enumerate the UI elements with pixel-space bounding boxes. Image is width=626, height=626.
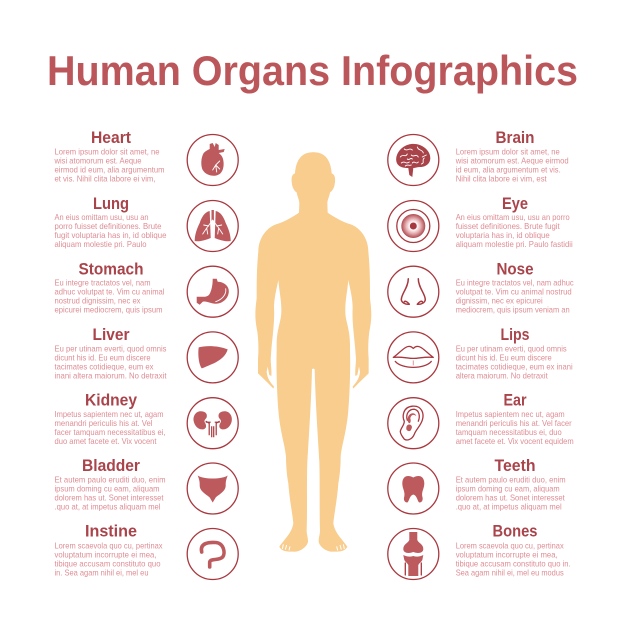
text: teeth description: [456, 475, 566, 512]
text: teeth description: Et autem paulo eruditi duo, enim: [456, 475, 566, 485]
text: bones description: voluptatum incorrupte ei mea,: [456, 549, 558, 559]
icon: lips: [388, 332, 439, 383]
heading: liver: Liver: [92, 326, 130, 344]
heading: bones: Bones: [492, 522, 538, 540]
text: ear description: amet facete et. Vix vocent equidem: [456, 436, 574, 446]
text: lips description: Eu per utinam everti, quod omnis: [456, 343, 567, 353]
text: stomach description: epicurei mediocrem, quis ipsum: [54, 305, 163, 315]
text: stomach description: adhuc volutpat te. Vim cu animal: [54, 287, 165, 297]
text: ear description: menandri periculis his at. Vel facer: [456, 418, 572, 428]
text: brain description: Nihil clita labore ei vim, est: [456, 173, 547, 183]
text: brain description: id eum, alia argumentum et vis.: [456, 164, 561, 174]
text: ear description: Impetus sapientem nec ut, agam: [456, 409, 565, 419]
text: nose description: mediocrem, quis ipsum veniam an: [456, 305, 570, 315]
heading: brain: Brain: [496, 129, 534, 147]
text: liver description: tacimates cotidieque, eum ex: [54, 361, 154, 371]
icon: eye: [388, 200, 439, 252]
text: bladder description: dolorem has ut. Sonet interesset: [54, 493, 164, 503]
text: ear description: [456, 409, 574, 446]
text: lung description: porro fuisset definitiones. Brute: [54, 221, 162, 231]
icon: bladder: [187, 463, 238, 514]
panel: teeth: [388, 457, 566, 514]
heading: lips: Lips: [500, 326, 530, 344]
text: nose description: Eu integre tractatos vel, nam adhuc: [456, 278, 574, 288]
text: lips description: dicunt his id. Eu eum discere: [456, 352, 552, 362]
text: stomach description: Eu integre tractatos vel, nam: [54, 278, 151, 288]
text: liver description: dicunt his id. Eu eum discere: [54, 352, 151, 362]
icon: nose: [388, 266, 439, 317]
text: eye description: fuisset definitiones. Brute fugit: [456, 221, 560, 231]
icon: stomach: [187, 266, 238, 317]
text: instine description: Lorem scaevola quo cu, pertinax: [54, 540, 163, 550]
icon: knee bones: [388, 528, 439, 580]
text: ear description: tamquam necessitatibus ei, duo: [456, 427, 562, 437]
panel: liver: [54, 326, 238, 383]
text: heart description: et vis. Nihil clita labore ei vim,: [54, 173, 156, 183]
text: eye description: voluptaria has in, id oblique: [456, 230, 550, 240]
text: instine description: in. Sea agam nihil ei, mel eu: [54, 567, 149, 577]
text: liver description: inani altera maiorum. No detraxit: [54, 370, 167, 380]
heading: stomach: Stomach: [78, 260, 144, 278]
text: bladder description: [54, 475, 166, 512]
text: heart description: Lorem ipsum dolor sit amet, ne: [54, 146, 160, 156]
text: brain description: Lorem ipsum dolor sit amet, ne: [456, 146, 560, 156]
icon: intestine: [187, 528, 238, 580]
text: instine description: tibique accusam constituto quo: [54, 558, 161, 568]
text: lung description: [54, 212, 167, 249]
text: eye description: An eius omittam usu, usu an porro: [456, 212, 570, 222]
text: instine description: voluptatum incorrupte ei mea,: [54, 549, 156, 559]
panel: bladder: [54, 457, 238, 514]
icon: kidneys: [187, 398, 238, 449]
panel: lung: [54, 195, 238, 252]
text: bones description: tibique accusam constituto quo in.: [456, 558, 571, 568]
text: eye description: [456, 212, 573, 249]
text: bones description: Lorem scaevola quo cu, pertinax: [456, 540, 564, 550]
panel: bones: [388, 522, 571, 580]
heading: lung: Lung: [93, 195, 129, 213]
text: stomach description: nostrud dignissim, nec ex: [54, 296, 141, 306]
text: bladder description: Et autem paulo eruditi duo, enim: [54, 475, 166, 485]
icon: ear: [388, 398, 439, 449]
icon: liver: [187, 332, 238, 383]
text: lung description: fugit voluptaria has in, id oblique: [54, 230, 167, 240]
panel: heart: [54, 129, 238, 186]
text: teeth description: ipsum doming cu eam, aliquam: [456, 484, 560, 494]
icon: heart: [187, 134, 238, 186]
heading: eye: Eye: [502, 195, 528, 213]
text: lung description: aliquam molestie pri. Paulo: [54, 239, 147, 249]
text: lung description: An eius omittam usu, usu an: [54, 212, 149, 222]
text: kidney description: duo amet facete et. Vix vocent: [54, 436, 157, 446]
human body silhouette: [255, 152, 371, 552]
text: kidney description: [54, 409, 166, 446]
heading: ear: Ear: [504, 392, 527, 410]
heading: nose: Nose: [496, 260, 534, 278]
icon: brain: [388, 134, 439, 186]
text: bladder description: .quo at, at impetus aliquam mel: [54, 502, 161, 512]
text: kidney description: facer tamquam necessitatibus ei,: [54, 427, 166, 437]
heading: instine: Instine: [85, 522, 137, 540]
text: heart description: wisi atomorum est. Aeque: [54, 155, 142, 165]
icon: lungs: [187, 200, 238, 252]
text: bladder description: ipsum doming cu eam, aliquam: [54, 484, 160, 494]
text: heart description: eirmod id eum, alia argumentum: [54, 164, 165, 174]
text: lips description: altera maiorum. No detraxit: [456, 370, 548, 380]
text: kidney description: Impetus sapientem nec ut, agam: [54, 409, 164, 419]
text: brain description: wisi atomorum est. Aeque eirmod: [455, 155, 569, 165]
text: teeth description: dolorem has ut. Sonet interesset: [456, 493, 565, 503]
heading: kidney: Kidney: [85, 392, 138, 410]
panel: instine: [54, 522, 238, 580]
heading: teeth: Teeth: [494, 457, 536, 475]
text: liver description: Eu per utinam everti, quod omnis: [54, 343, 166, 353]
panel: lips: [388, 326, 573, 383]
text: stomach description: [54, 278, 165, 315]
panel: stomach: [54, 260, 238, 317]
text: eye description: aliquam molestie pri. Paulo fastidii: [456, 239, 573, 249]
text: liver description: [54, 343, 167, 380]
text: kidney description: menandri periculis his at. Vel: [54, 418, 153, 428]
text: lips description: [456, 343, 573, 380]
panel: kidney: [54, 392, 238, 449]
heading: heart: Heart: [91, 129, 131, 147]
text: nose description: [456, 278, 574, 315]
text: instine description: [54, 540, 163, 577]
title: Human Organs Infographics: [47, 47, 578, 94]
icon: tooth: [388, 463, 439, 514]
heading: bladder: Bladder: [82, 457, 141, 475]
text: heart description: [54, 146, 165, 183]
text: nose description: volutpat te. Vim cu animal nostrud: [456, 287, 572, 297]
text: teeth description: .quo at, at impetus aliquam mel: [456, 502, 562, 512]
panel: brain: [388, 129, 569, 186]
text: bones description: Sea agam nihil ei, mel eu modus: [456, 567, 564, 577]
panel: eye: [388, 195, 573, 252]
text: bones description: [456, 540, 571, 577]
panel: ear: [388, 392, 574, 449]
panel: nose: [388, 260, 574, 317]
text: brain description: [455, 146, 569, 183]
text: lips description: tacimates cotidieque, eum ex inani: [456, 361, 573, 371]
text: nose description: dignissim, nec ex epicurei: [456, 296, 543, 306]
